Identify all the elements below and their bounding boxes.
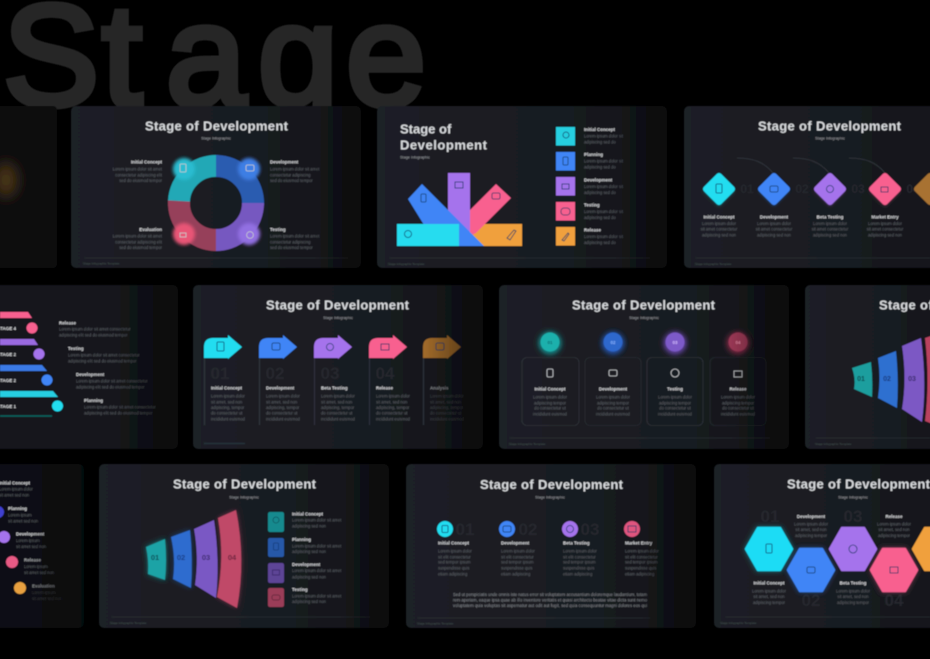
diamond captions: Lorem ipsum dolor	[813, 221, 848, 226]
legend text: Lorem ipsum dolor sit	[584, 158, 624, 164]
column 3: sit elit consectetur	[563, 554, 596, 560]
column 1: etiam adipiscing	[438, 572, 468, 576]
column 4: Lorem ipsum dolor	[625, 548, 660, 554]
panel: numbered cards slide	[499, 285, 789, 449]
text: testing: Testing	[270, 227, 286, 232]
faint hexagon numbers: 01	[761, 507, 779, 526]
card 4: adipiscing tempor	[722, 400, 755, 406]
legend text	[292, 512, 342, 604]
footer label: Stage Infographic Template	[815, 442, 852, 446]
legend text: Lorem ipsum dolor sit	[584, 209, 624, 214]
column 4: suspendisse quis	[625, 566, 656, 570]
subtitle: Stage Infographic	[201, 136, 231, 140]
subtitle: Stage Infographic	[323, 316, 353, 320]
stage descriptions: Release	[59, 320, 77, 326]
diamond captions: adipiscing sed non	[813, 232, 848, 238]
funnel segments: 01	[857, 376, 865, 383]
stage descriptions: adipiscing elit sed do eiusmod tempor	[84, 410, 153, 416]
footer label: Stage Infographic Template	[83, 262, 120, 266]
diamond captions: sit amet consectetur	[756, 226, 793, 232]
legend text: Planning	[584, 152, 603, 157]
panel: columns with paragraph slide	[406, 464, 696, 628]
column 3: Lorem ipsum dolor	[563, 548, 598, 554]
top captions	[794, 514, 912, 538]
text: evaluation: sed do eiusmod tempor	[119, 245, 163, 250]
card 2: Lorem ipsum dolor	[596, 394, 631, 400]
stage labels	[0, 326, 16, 409]
heading: Stage of Development	[145, 118, 289, 134]
legend text: Initial Concept	[292, 512, 324, 516]
list markers	[0, 506, 26, 594]
diamond captions: Market Entry	[871, 214, 899, 220]
subtitle: Stage Infographic	[400, 156, 430, 160]
arrow column 3: adipiscing, tempor	[321, 405, 355, 410]
arrow column 3: do consectetur ut	[321, 410, 353, 416]
footer label: Stage Infographic Template	[509, 442, 546, 446]
card 1: Initial Concept	[534, 386, 566, 392]
diamond captions: Beta Testing	[817, 214, 844, 220]
legend text: Release	[584, 228, 602, 232]
legend text: adipiscing sed non	[292, 574, 327, 580]
arrow column 3: 03	[321, 364, 339, 383]
arrow column 4: incididunt euismod	[376, 416, 411, 422]
card 2: adipiscing tempor	[597, 400, 630, 406]
legend tiles	[556, 127, 575, 246]
text: development	[270, 160, 320, 183]
legend text: adipiscing sed do	[584, 164, 616, 170]
column 1: Lorem ipsum dolor	[438, 548, 473, 554]
column 2	[499, 520, 537, 576]
faint step numbers: 02	[795, 182, 809, 196]
legend text: adipiscing sed non	[292, 549, 327, 554]
diamond captions: adipiscing sed non	[702, 232, 737, 238]
stage descriptions: Testing	[68, 346, 84, 351]
number bubbles	[539, 332, 749, 354]
subtitle: Stage Infographic	[815, 136, 845, 140]
arrow column 2: sit amet, sed non	[266, 400, 298, 404]
text: initial concept	[113, 160, 163, 183]
top captions: Release	[885, 514, 903, 519]
legend text: Planning	[292, 537, 311, 542]
arrow column 1: do consectetur ut	[211, 410, 243, 416]
card 4: incididunt euismod	[721, 412, 756, 416]
card 3: Lorem ipsum dolor	[658, 394, 693, 400]
card 4: Release	[729, 386, 747, 392]
arrow column 4: do consectetur ut	[376, 410, 408, 416]
list text: Development	[16, 532, 45, 536]
diamond captions: adipiscing sed non	[757, 232, 792, 238]
stage descriptions: Lorem ipsum dolor sit amet consectetur	[68, 352, 140, 358]
paragraph: rem aperiam, eaque ipsa quae ab illo inventore veritatis et quasi architecto beatae vitae dicta sunt nemo	[453, 598, 648, 602]
footer label: Stage Infographic Template	[417, 622, 454, 626]
list text	[0, 480, 63, 601]
arrow column 4: sit amet, sed non	[376, 400, 408, 404]
arrow column 5: Analysis	[430, 386, 449, 390]
legend text: adipiscing sed do	[584, 140, 616, 144]
heading: Stage of	[400, 122, 452, 136]
bottom captions: Lorem ipsum dolor	[752, 588, 787, 594]
diamond captions: adipiscing sed non	[868, 232, 903, 238]
arrow column 3: Lorem ipsum dolor	[321, 394, 356, 398]
card 4: do consectetur ut	[722, 406, 755, 410]
legend text: Lorem ipsum dolor sit	[584, 134, 624, 138]
card 3: adipiscing tempor	[659, 400, 692, 406]
subtitle: Stage Infographic	[535, 496, 565, 500]
list text: Release	[24, 558, 42, 562]
list text: Lorem ipsum	[32, 590, 56, 595]
legend text: Lorem ipsum dolor sit amet	[292, 568, 342, 573]
heading	[400, 122, 488, 152]
bottom captions	[752, 580, 871, 605]
funnel chart: 03	[202, 553, 210, 562]
legend text: Lorem ipsum dolor sit	[584, 184, 624, 189]
column 1	[437, 520, 474, 576]
stage descriptions: adipiscing elit sed do eiusmod tempor	[59, 332, 128, 338]
text: development: Development	[270, 160, 299, 164]
column 4: sed tempor ipsum	[625, 560, 658, 564]
column 4: etiam adipiscing	[625, 572, 655, 576]
paragraph: voluptatem quia voluptas sit aspernatur aut odit aut fugit, sed quia consequuntur magni dolores eos qui	[453, 603, 647, 608]
top captions: adipiscing tempor	[795, 533, 828, 538]
column 3: suspendisse quis	[563, 566, 594, 570]
text: initial concept: consectetur adipiscing elit	[115, 172, 163, 178]
column 3: Beta Testing	[563, 540, 590, 546]
top captions: sit amet, sed non	[795, 527, 827, 532]
column 4: Market Entry	[625, 540, 653, 546]
subtitle: Stage Infographic	[629, 316, 659, 320]
number bubbles: 04	[735, 340, 741, 345]
card 3: Testing	[667, 386, 683, 392]
heading: Stage of Development	[787, 476, 930, 492]
stage descriptions: Lorem ipsum dolor sit amet consectetur	[84, 404, 156, 410]
diamond captions: sit amet consectetur	[812, 226, 849, 232]
arrow column 5: adipiscing, tempor	[430, 405, 464, 410]
column 1: sit elit consectetur	[438, 554, 471, 560]
bottom captions: Lorem ipsum dolor	[836, 588, 871, 594]
arrow column 5: do consectetur ut	[430, 410, 462, 416]
list text: sit amet sed non	[8, 518, 39, 524]
panel: arrows slide	[193, 285, 483, 449]
bottom captions: sit amet, sed non	[753, 594, 785, 599]
faint step numbers	[740, 182, 920, 196]
footer label: Stage Infographic Template	[695, 262, 732, 266]
legend text: Lorem ipsum dolor sit amet	[292, 544, 342, 548]
fan chart	[397, 173, 522, 246]
list text: Lorem ipsum dolor	[0, 486, 34, 492]
diamond captions: Initial Concept	[703, 214, 735, 220]
arrow column 5	[423, 335, 465, 425]
card 1: adipiscing tempor	[534, 400, 567, 406]
arrow column 2: do consectetur ut	[266, 410, 298, 416]
text: development: Lorem ipsum dolor sit amet	[270, 166, 320, 172]
legend text: Testing	[292, 587, 308, 592]
column 2: 02	[519, 520, 537, 539]
list text: Lorem ipsum	[8, 512, 32, 518]
text: testing: consectetur adipiscing	[270, 240, 311, 244]
top captions: adipiscing tempor	[878, 533, 911, 538]
arrow column 2: adipiscing, tempor	[266, 405, 300, 410]
text: evaluation: consectetur adipiscing elit	[115, 240, 163, 244]
arrow column 3: incididunt euismod	[321, 416, 356, 422]
list text: Lorem ipsum	[24, 564, 48, 569]
list text: sit amet sed non	[16, 544, 47, 549]
arrow column 5: incididunt euismod	[430, 416, 465, 422]
legend text: Testing	[584, 202, 600, 208]
legend text: Lorem ipsum dolor sit amet	[292, 594, 342, 598]
arrow column 2	[259, 335, 301, 425]
text: evaluation: Lorem ipsum dolor sit amet	[113, 234, 163, 238]
funnel chart: 02	[177, 553, 185, 562]
column 4: sit elit consectetur	[625, 554, 658, 560]
funnel chart: 01	[151, 553, 159, 562]
diamond captions: Lorem ipsum dolor	[757, 221, 792, 226]
column 1: 01	[456, 520, 474, 539]
legend text: adipiscing sed do	[584, 190, 616, 195]
text: testing: Lorem ipsum dolor sit amet	[270, 234, 320, 238]
list text: sit amet sed non	[32, 596, 63, 601]
column 2: sit elit consectetur	[501, 554, 534, 560]
stage descriptions: adipiscing elit sed do eiusmod tempor	[76, 384, 145, 390]
arrow column 1: 01	[211, 364, 229, 383]
funnel segments: 02	[883, 376, 891, 383]
number bubbles: 01	[547, 340, 553, 345]
orange glow remnant	[0, 162, 18, 198]
faint hexagon numbers	[761, 507, 904, 610]
column 2: suspendisse quis	[501, 566, 532, 570]
diamond captions: Lorem ipsum dolor	[702, 221, 737, 226]
footer label: Stage Infographic Template	[720, 621, 757, 625]
arrow column 3: Beta Testing	[321, 386, 348, 390]
panel: funnel slide	[99, 464, 389, 628]
column 2: etiam adipiscing	[501, 572, 531, 576]
arrow column 3: sit amet, sed non	[321, 400, 353, 404]
panel: diamonds slide	[684, 106, 930, 268]
column 3: etiam adipiscing	[563, 572, 593, 576]
list text: sit amet sed non	[24, 570, 55, 575]
footer label: Stage Infographic Template	[110, 621, 147, 625]
arrow column 5: sit amet, sed non	[430, 400, 462, 404]
number bubbles: 03	[672, 340, 678, 345]
text: initial concept: sed do eiusmod tempor	[119, 178, 163, 183]
list text: Lorem ipsum	[16, 538, 40, 543]
bottom captions: adipiscing tempor	[753, 600, 786, 605]
arrow column 4: Lorem ipsum dolor	[376, 394, 411, 398]
faint hexagon numbers: 02	[802, 591, 820, 610]
arrow column 4	[369, 335, 411, 425]
diamond captions: sit amet consectetur	[701, 226, 738, 232]
funnel segments: 03	[908, 376, 916, 383]
column 1: suspendisse quis	[438, 566, 469, 570]
heading: Stage of Development	[758, 118, 902, 134]
column 3: 03	[581, 520, 599, 539]
stage descriptions	[59, 320, 156, 416]
legend tiles	[268, 512, 284, 607]
paragraph: Sed ut perspiciatis unde omnis iste natus error sit voluptatem accusantium doloremque laudantium, totam	[453, 592, 648, 597]
card 2	[585, 358, 641, 426]
legend text: Development	[292, 562, 321, 567]
arrow column 2: 02	[266, 364, 284, 383]
diamond captions: Lorem ipsum dolor	[868, 221, 903, 226]
text: testing	[270, 227, 320, 250]
text: testing: sed do eiusmod tempor	[270, 245, 313, 250]
card 1: Lorem ipsum dolor	[533, 394, 568, 400]
stage bars	[0, 312, 58, 416]
arrow column 4: adipiscing, tempor	[376, 405, 410, 410]
diamond captions: sit amet consectetur	[867, 226, 904, 232]
bottom captions: sit amet, sed non	[837, 594, 869, 599]
connector curves	[737, 158, 885, 173]
top captions: Lorem ipsum dolor	[794, 522, 829, 526]
text: evaluation: Evaluation	[139, 227, 162, 232]
card 2: incididunt euismod	[596, 412, 631, 416]
text: evaluation	[113, 227, 163, 250]
panel: fan bars slide	[377, 106, 667, 268]
stage descriptions: Lorem ipsum dolor sit amet consectetur	[76, 378, 148, 384]
stage descriptions: adipiscing elit sed do eiusmod tempor	[68, 358, 137, 364]
faint step numbers: 04	[906, 182, 920, 196]
arrow column 3	[314, 335, 356, 425]
card 1: incididunt euismod	[533, 412, 568, 416]
bottom captions: Beta Testing	[840, 580, 867, 586]
bottom captions: Initial Concept	[753, 580, 785, 586]
diamond captions: Development	[760, 214, 789, 220]
heading: Stage of Development	[266, 298, 410, 312]
card 2: Development	[599, 386, 628, 392]
arrow column 4: 04	[376, 364, 395, 383]
ring chart	[173, 158, 260, 245]
funnel chart: 04	[228, 553, 237, 562]
arrow column 1	[204, 335, 246, 425]
top captions: Lorem ipsum dolor	[877, 522, 912, 526]
legend text: adipiscing sed non	[292, 524, 327, 528]
card 3	[647, 358, 703, 426]
stage descriptions: Development	[76, 372, 105, 377]
footer progress bar	[204, 442, 245, 444]
legend text: Lorem ipsum dolor sit	[584, 234, 624, 239]
heading: Stage of Development	[572, 298, 716, 312]
column 1: Initial Concept	[438, 540, 470, 546]
footer label: Stage Infographic Template	[388, 262, 425, 266]
panel: partial slide far left top	[0, 106, 57, 268]
column 3	[562, 520, 599, 576]
arrow column 2: Development	[266, 386, 295, 390]
stage markers	[26, 322, 63, 412]
arrow column 1: adipiscing, tempor	[211, 405, 245, 410]
text: initial concept: Initial Concept	[131, 160, 162, 164]
faint hexagon numbers: 03	[844, 507, 862, 526]
panel: stacked stages slide	[0, 285, 178, 449]
faint step numbers: 03	[851, 182, 865, 196]
card 2: do consectetur ut	[597, 406, 630, 410]
legend text	[584, 127, 624, 245]
arrow column 1: Lorem ipsum dolor	[211, 394, 246, 398]
stage descriptions: Planning	[84, 398, 103, 403]
funnel chart	[146, 510, 241, 608]
diamonds row	[704, 176, 930, 206]
card 1	[522, 358, 579, 426]
subtitle: Stage Infographic	[838, 496, 868, 500]
heading: Stage of Development	[173, 476, 317, 492]
arrow column 1: incididunt euismod	[211, 416, 246, 422]
hexagons	[745, 527, 930, 592]
top captions: Development	[797, 514, 826, 519]
panel: ring diagram slide	[71, 106, 361, 268]
column 4	[624, 521, 660, 576]
number bubbles: 02	[610, 340, 616, 345]
card 4	[710, 358, 766, 426]
column 2: sed tempor ipsum	[501, 560, 534, 564]
panel: hexagon slide	[714, 464, 930, 628]
faint hexagon numbers: 04	[885, 591, 904, 610]
legend text: Lorem ipsum dolor sit amet	[292, 518, 342, 522]
column 3: sed tempor ipsum	[563, 560, 596, 564]
card 3: incididunt euismod	[658, 412, 693, 416]
column 2: Development	[501, 540, 530, 546]
text: development: consectetur adipiscing	[270, 172, 311, 178]
funnel segments	[852, 333, 930, 427]
arrow column 2: Lorem ipsum dolor	[266, 394, 301, 398]
legend text: Development	[584, 178, 613, 182]
card 1: do consectetur ut	[534, 406, 567, 410]
text: initial concept: Lorem ipsum dolor sit amet	[113, 166, 163, 172]
panel: timeline list partial left	[0, 464, 84, 628]
arrow column 1: Initial Concept	[211, 386, 243, 390]
legend text: adipiscing sed non	[292, 599, 327, 604]
paragraph	[453, 592, 648, 608]
list text: Planning	[8, 506, 27, 511]
bottom captions: adipiscing tempor	[837, 600, 870, 605]
faint step numbers: 01	[740, 182, 754, 196]
heading: Development	[400, 138, 488, 152]
column 2: Lorem ipsum dolor	[501, 548, 536, 554]
heading: Stage of Development	[480, 477, 624, 492]
legend text: adipiscing sed do	[584, 240, 616, 245]
panel: funnel slide partial right	[805, 285, 930, 449]
list text: Evaluation	[32, 584, 55, 588]
top captions: sit amet, sed non	[878, 527, 910, 532]
legend text: adipiscing sed do	[584, 215, 616, 220]
card 4: Lorem ipsum dolor	[721, 394, 756, 400]
subtitle: Stage Infographic	[229, 496, 259, 500]
stage descriptions: Lorem ipsum dolor sit amet consectetur	[59, 326, 131, 332]
legend text: Initial Concept	[584, 127, 616, 132]
text: development: sed do eiusmod tempor	[270, 178, 313, 183]
card 3: do consectetur ut	[659, 406, 692, 410]
column 1: sed tempor ipsum	[438, 560, 471, 564]
arrow column 5: Lorem ipsum dolor	[430, 394, 465, 398]
diamond captions	[701, 214, 904, 238]
arrow column 1: sit amet, sed non	[211, 400, 243, 404]
arrow column 2: incididunt euismod	[266, 416, 301, 422]
arrow column 4: Release	[376, 386, 394, 390]
